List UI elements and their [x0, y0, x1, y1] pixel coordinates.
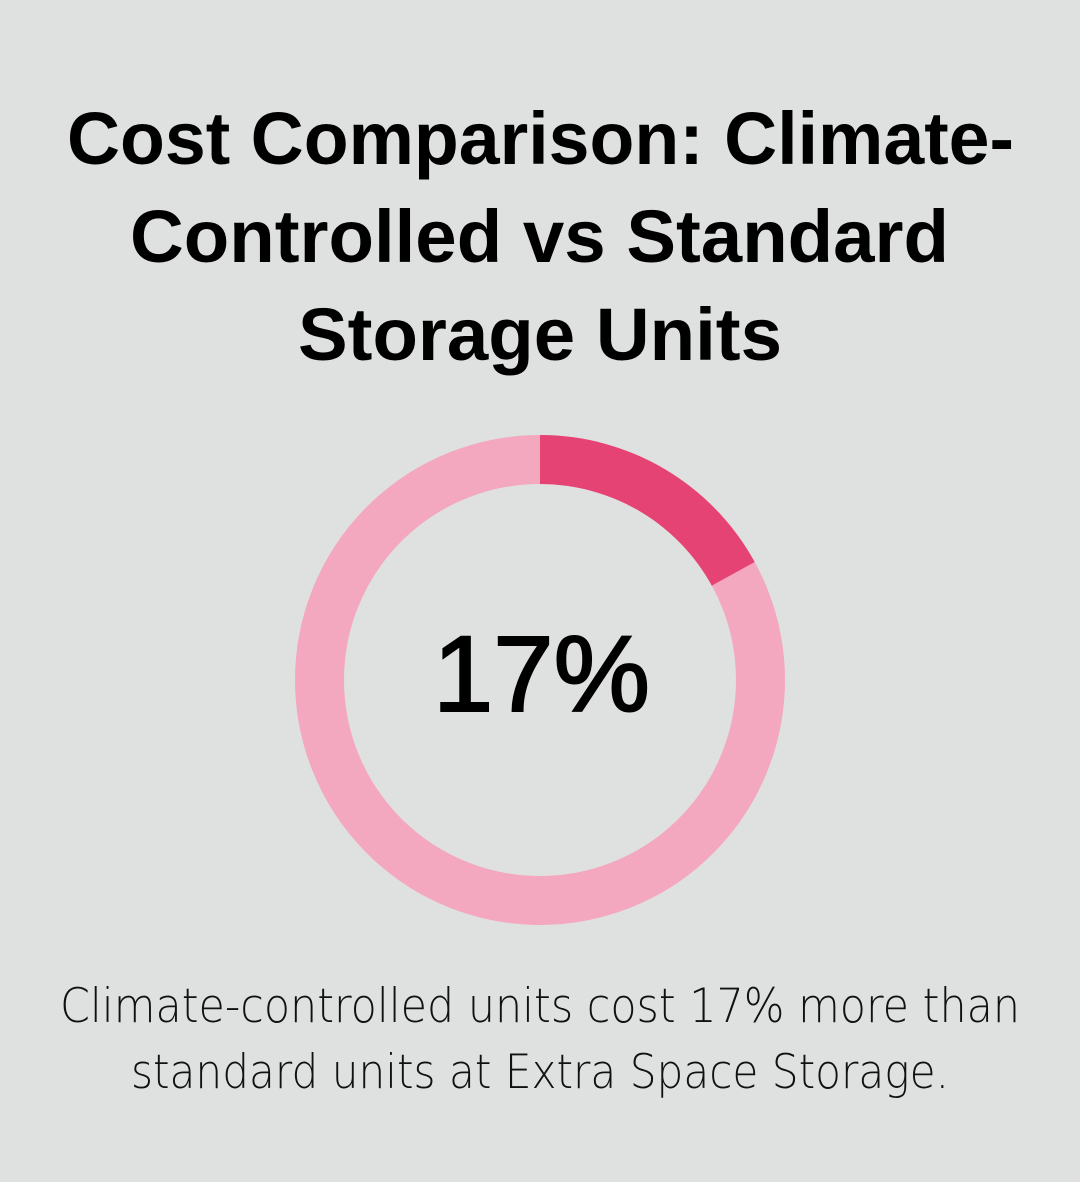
title: [67, 97, 1014, 376]
caption: [60, 979, 1020, 1100]
donut chart: 17%: [320, 435, 760, 900]
title: Cost Comparison: Climate-: [67, 97, 1014, 180]
caption: standard units at Extra Space Storage.: [131, 1045, 949, 1100]
donut centre value: 17%: [433, 613, 650, 734]
donut track: [320, 460, 760, 900]
title: Storage Units: [298, 293, 782, 376]
title: Controlled vs Standard: [130, 195, 949, 278]
donut highlighted segment: [540, 435, 755, 586]
